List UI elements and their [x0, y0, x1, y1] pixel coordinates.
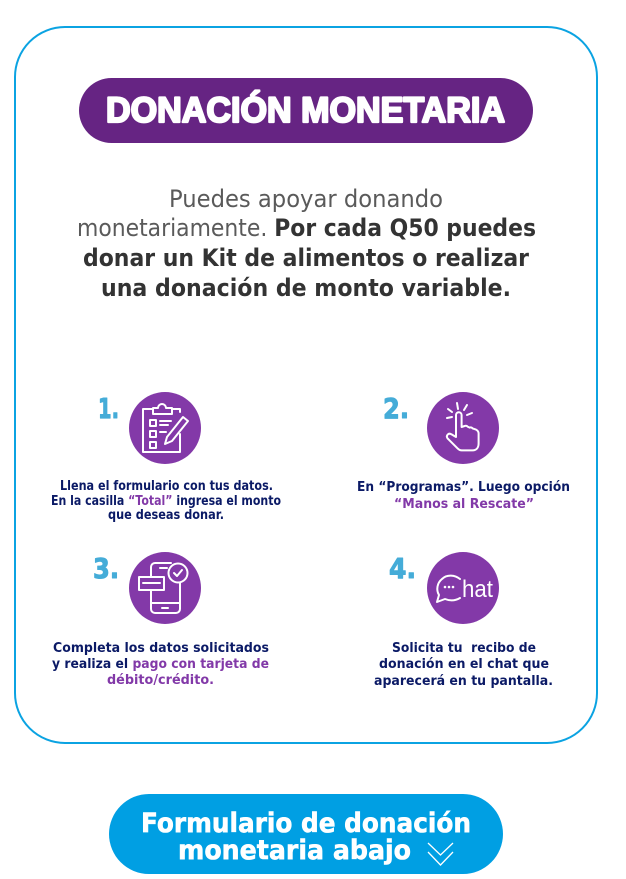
step 2 text — [357, 479, 570, 512]
icon: chat: hat — [462, 576, 493, 603]
intro text: una donación de monto variable. — [101, 274, 511, 302]
step 3 number: 3. — [93, 552, 119, 585]
panel: main frame — [15, 27, 597, 743]
intro text: Puedes apoyar donando — [169, 185, 443, 213]
step 4 text: aparecerá en tu pantalla. — [374, 673, 553, 689]
button: form link — [109, 794, 503, 874]
step 2 — [357, 392, 570, 512]
step 3 text: y realiza el pago con tarjeta de — [52, 656, 269, 672]
intro text: monetariamente. Por cada Q50 puedes — [77, 214, 536, 242]
step 3 text: débito/crédito. — [107, 672, 214, 688]
step 3 text: Completa los datos solicitados — [53, 640, 269, 656]
icon: tapping hand — [427, 392, 499, 464]
step 4 text — [374, 640, 553, 689]
step 4 number: 4. — [389, 552, 416, 585]
step 1 text: que deseas donar. — [108, 507, 224, 523]
step 4 — [374, 552, 553, 689]
step 1 number: 1. — [98, 392, 119, 425]
title pill — [79, 78, 533, 143]
icon: chat — [427, 552, 499, 624]
step 3 text — [52, 640, 269, 688]
step 4 text: donación en el chat que — [379, 656, 549, 672]
button: form link: monetaria abajo — [178, 835, 411, 866]
title pill: DONACIÓN MONETARIA — [106, 90, 505, 130]
icon: phone with card and check — [129, 552, 201, 624]
step 2 text: En “Programas”. Luego opción — [357, 479, 570, 495]
step 3 — [52, 552, 269, 688]
step 2 text: “Manos al Rescate” — [394, 496, 534, 512]
step 1 text: En la casilla “Total” ingresa el monto — [51, 493, 281, 509]
intro text: donar un Kit de alimentos o realizar — [83, 244, 529, 272]
icon: double chevron — [428, 843, 453, 865]
step 1 text — [51, 478, 281, 523]
intro text — [77, 185, 536, 302]
step 2 number: 2. — [383, 392, 409, 425]
button: form link: Formulario de donación — [141, 808, 471, 839]
icon: clipboard checklist — [129, 392, 201, 464]
step 1 text: Llena el formulario con tus datos. — [60, 478, 273, 494]
step 4 text: Solicita tu recibo de — [392, 640, 536, 656]
step 1 — [51, 392, 281, 523]
